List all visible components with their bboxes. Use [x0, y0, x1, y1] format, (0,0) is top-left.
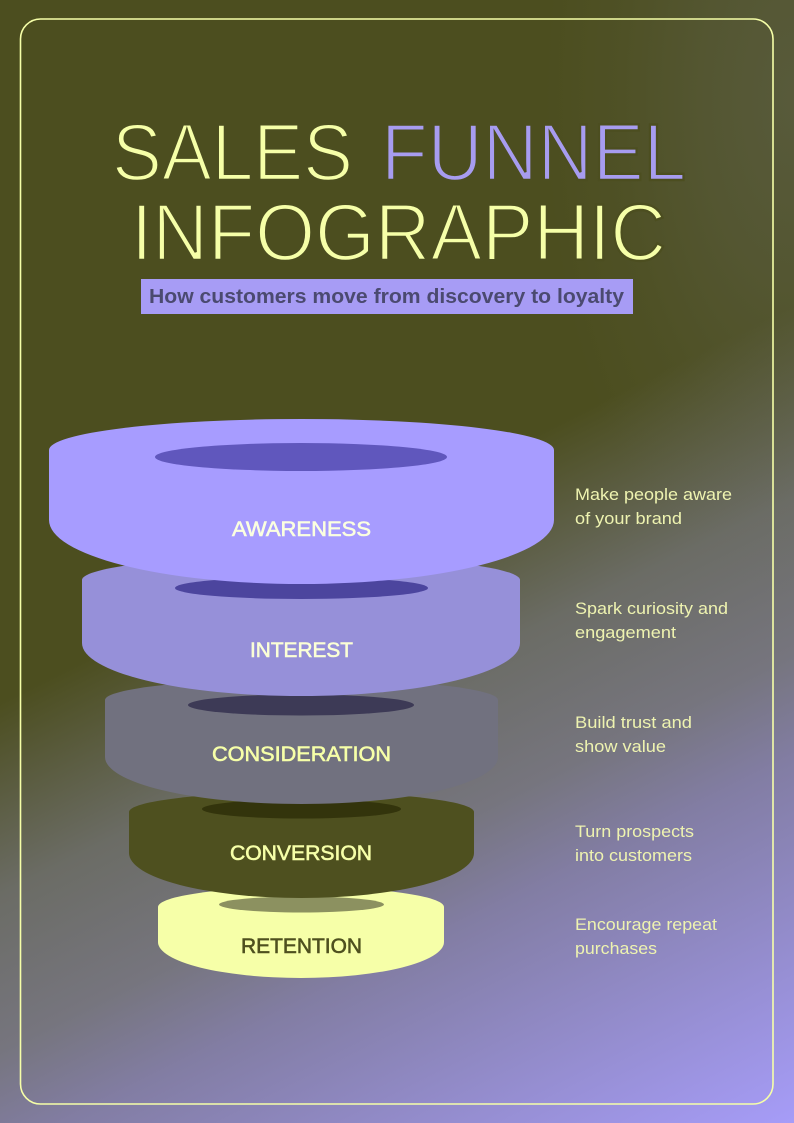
funnel chart: [49, 419, 554, 978]
title: INFOGRAPHIC: [131, 188, 666, 278]
description: retention: [575, 915, 717, 958]
description: interest: Spark curiosity and: [575, 599, 728, 618]
description: awareness: Make people aware: [575, 485, 732, 504]
description: retention: Encourage repeat: [575, 915, 717, 934]
tier: awareness: AWARENESS: [232, 518, 371, 541]
tier: conversion: CONVERSION: [230, 842, 372, 865]
title: FUNNEL: [381, 108, 686, 198]
description: consideration: Build trust and: [575, 713, 692, 732]
description: interest: engagement: [575, 623, 676, 642]
description: interest: [575, 599, 728, 642]
description: conversion: [575, 822, 694, 865]
tier: retention: [158, 887, 444, 978]
title: [112, 108, 686, 278]
description: awareness: of your brand: [575, 509, 682, 528]
description: conversion: Turn prospects: [575, 822, 694, 841]
tier: retention: RETENTION: [241, 935, 362, 958]
description: retention: purchases: [575, 939, 657, 958]
tier: interest: [82, 556, 520, 696]
title: SALES: [112, 108, 353, 198]
description: consideration: show value: [575, 737, 666, 756]
subtitle banner: How customers move from discovery to loyalty: [149, 285, 625, 308]
tier: conversion: [129, 792, 474, 898]
subtitle banner: [141, 279, 633, 314]
tier: consideration: [105, 679, 498, 804]
tier: consideration: CONSIDERATION: [212, 743, 391, 766]
description: consideration: [575, 713, 692, 756]
description: conversion: into customers: [575, 846, 692, 865]
description: awareness: [575, 485, 732, 528]
tier: awareness: [49, 419, 554, 584]
tier: interest: INTEREST: [250, 639, 353, 662]
